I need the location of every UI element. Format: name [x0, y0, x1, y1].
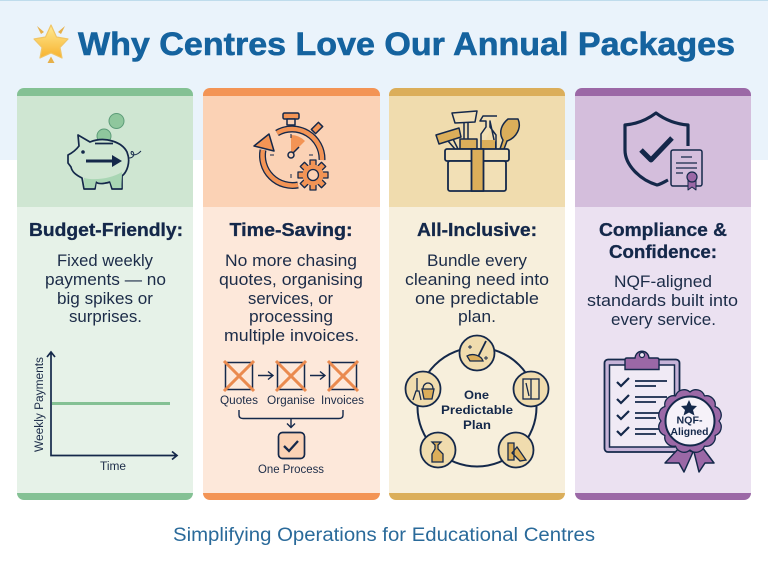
heading: Compliance &: [599, 220, 727, 240]
process diagram: [220, 361, 364, 476]
footer caption: Simplifying Operations for Educational Centres: [173, 525, 595, 546]
clipboard with badge: [604, 351, 721, 472]
ribbon badge: Aligned: [670, 426, 708, 438]
text block: [405, 252, 549, 326]
process diagram: One Process: [258, 464, 324, 476]
process diagram: Quotes: [220, 395, 258, 407]
text block: processing: [249, 308, 333, 326]
icon: star: [34, 25, 68, 63]
text block: No more chasing: [225, 252, 357, 270]
text block: payments — no: [45, 271, 166, 289]
text block: multiple invoices.: [224, 327, 359, 345]
cycle diagram: [406, 336, 548, 468]
text block: [45, 252, 166, 326]
panel: budget-friendly: [17, 88, 193, 500]
centre label: One: [464, 388, 489, 402]
text block: [587, 273, 738, 329]
heading: Time-Saving:: [230, 220, 352, 240]
process diagram: Invoices: [321, 395, 364, 407]
ribbon badge: [659, 390, 721, 472]
node: window: [514, 372, 548, 406]
line chart: Weekly Payments: [34, 357, 46, 452]
node: bucket and broom: [406, 372, 440, 406]
heading: All-Inclusive:: [417, 220, 537, 240]
heading: Confidence:: [609, 242, 717, 262]
node: spray bottle: [420, 432, 456, 468]
ribbon badge: NQF-: [676, 414, 703, 426]
gear: [298, 160, 328, 190]
panel: compliance and confidence: [575, 88, 751, 500]
icon: piggy bank: [68, 114, 141, 189]
title: Why Centres Love Our Annual Packages: [78, 26, 735, 62]
text block: Bundle every: [427, 252, 528, 270]
process diagram: Organise: [267, 395, 315, 407]
node: mop: [460, 336, 494, 370]
icon: box of cleaning supplies: [436, 111, 519, 191]
panel: all-inclusive: [389, 88, 565, 500]
centre label: Plan: [463, 418, 491, 432]
text block: surprises.: [69, 308, 142, 326]
icon: stopwatch: [254, 113, 328, 190]
centre label: [441, 388, 513, 432]
crossed-out steps: [224, 361, 358, 391]
clipboard: [604, 351, 680, 452]
node: cleaning tools: [498, 432, 534, 468]
text block: Fixed weekly: [57, 252, 154, 270]
text block: one predictable: [415, 290, 539, 308]
text block: [219, 252, 363, 345]
text block: standards built into: [587, 292, 738, 310]
centre label: Predictable: [441, 403, 513, 417]
text block: plan.: [458, 308, 496, 326]
heading: [599, 220, 727, 262]
panel: time-saving: [203, 88, 380, 500]
text block: NQF-aligned: [614, 273, 712, 291]
bracket arrow: [239, 410, 343, 428]
text block: quotes, organising: [219, 271, 363, 289]
heading: Budget-Friendly:: [29, 220, 183, 240]
checkbox: [278, 432, 304, 458]
text block: big spikes or: [57, 290, 154, 308]
line chart: Time: [100, 461, 126, 473]
text block: services, or: [248, 290, 334, 308]
text block: cleaning need into: [405, 271, 549, 289]
line chart: [34, 352, 177, 473]
icon: shield with certificate: [625, 113, 702, 190]
text block: every service.: [611, 311, 716, 329]
arrows between steps: [258, 372, 325, 380]
